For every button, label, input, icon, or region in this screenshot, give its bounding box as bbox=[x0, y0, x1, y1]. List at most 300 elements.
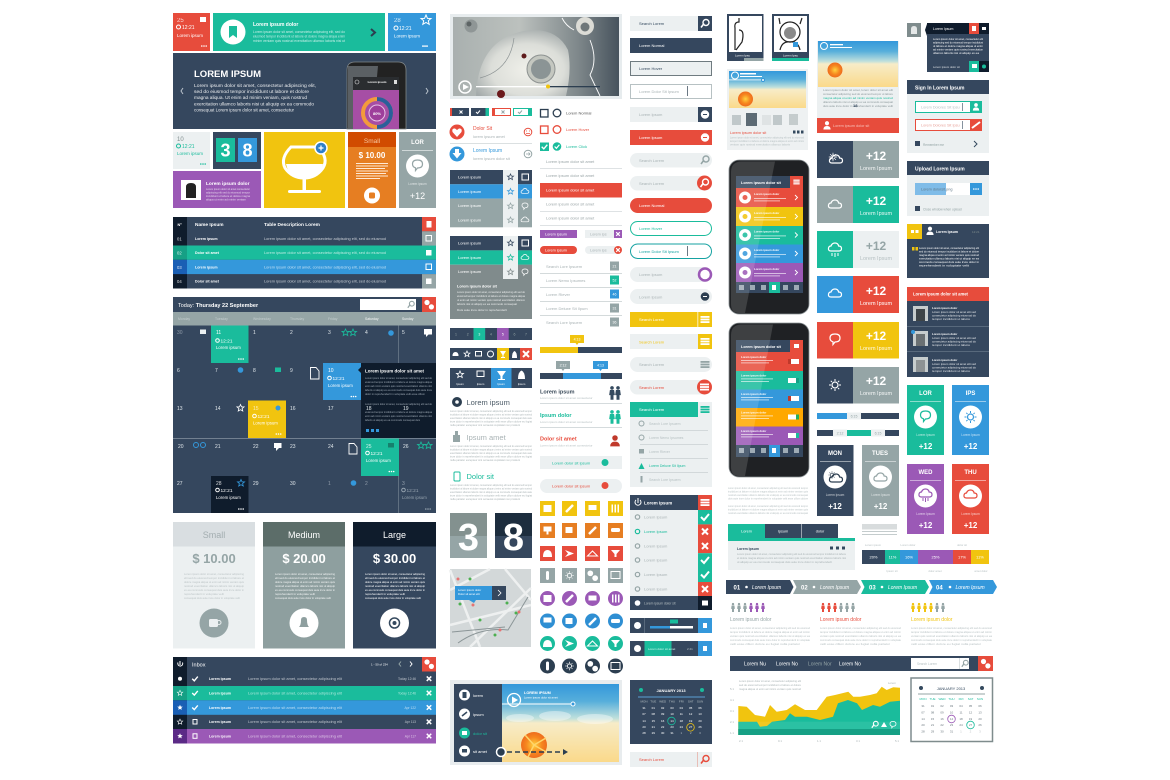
area chart: 5.1 bbox=[895, 739, 899, 743]
input set: pill fields: Lorem Hover bbox=[639, 226, 663, 231]
beach card with red footer: consectetur adipiscing sed do eiusmod tempor ut labore bbox=[823, 92, 893, 96]
white mini calendar: 01 bbox=[931, 704, 934, 708]
hero banner with phone: sed do eiusmod tempor incididunt ut labore et dolore bbox=[194, 89, 309, 95]
tag chips bbox=[540, 230, 622, 254]
segmented percentage bar: dolor amet bbox=[928, 569, 942, 573]
quote card: commodo consequat duis aute irure dolor in bbox=[919, 260, 979, 264]
list with count badges: Search Lore Ipsuem bbox=[546, 264, 583, 269]
text link list: Lorem ipsum dolor sit amet bbox=[546, 216, 595, 220]
white mini calendar: 12 bbox=[969, 710, 972, 714]
data table: 03 bbox=[177, 265, 182, 270]
calendar popover: laboris ut aliquip ex ea commodo consequat duis aute irure bbox=[365, 388, 432, 392]
notification popup: adipiscing sed do eiusmod tempor incididunt bbox=[933, 40, 983, 44]
tile: flip counter 3 8: 3 bbox=[220, 140, 231, 160]
phone one: Lorem ipsum dolor sit bbox=[741, 181, 782, 185]
dark mini calendar: 09 bbox=[661, 712, 665, 716]
area chart: 5.1 bbox=[730, 687, 734, 691]
area chart: 3.1 bbox=[856, 739, 860, 743]
toggle tags bbox=[450, 108, 532, 116]
side menu one: Lorem ipsum bbox=[458, 189, 482, 194]
beach card with red footer: ullamco laboris nisi ut aliquip ex ea commodo consequat bbox=[823, 100, 893, 104]
white mini calendar: 31 bbox=[950, 730, 953, 734]
calendar day numbers: 27 bbox=[177, 481, 183, 487]
tile: flip counter 3 8 bbox=[213, 132, 261, 169]
heading block: dolor sit: nulla pariatur excepteur sint occaecat cupidatat non proident bbox=[450, 497, 520, 501]
forecast card: ips: Lorem Ipsum bbox=[961, 433, 980, 437]
notification popup bbox=[907, 23, 989, 72]
calendar event: 11 green: Lorem ipsum bbox=[216, 345, 241, 350]
navigation bar: Lorem Nu bbox=[744, 662, 766, 668]
calendar day numbers: 13 bbox=[177, 406, 183, 412]
forecast card: lor: LOR bbox=[919, 391, 932, 397]
comic tile two bbox=[772, 14, 809, 61]
calendar day numbers: 2 bbox=[365, 481, 368, 487]
dark mini calendar: 20 bbox=[698, 719, 702, 723]
calendar weekday bar: Sunday bbox=[402, 317, 414, 321]
white mini calendar: 04 bbox=[959, 704, 963, 708]
phone in banner: 80% bbox=[373, 111, 381, 116]
weather tile: red yellow bbox=[817, 322, 899, 358]
music player with beach: LOREM IPSUM bbox=[524, 691, 551, 695]
dark mini calendar: 2 bbox=[690, 731, 692, 735]
notice buttons: Lorem dolor sit ipsum bbox=[552, 483, 591, 488]
tile: purple profile: adipiscing elit sed do eiusmod tempor bbox=[206, 190, 250, 194]
heading block: ipsum amet: irure dolor in reprehenderit in voluptate velit esse cillum dolore eu fugiat bbox=[450, 454, 532, 458]
heading block: lorem ipsum: incididunt ut labore et dolore magna aliqua ut enim ad minim veniam quis nostrud bbox=[450, 412, 532, 416]
step arrows: 03 bbox=[869, 586, 876, 592]
segmented percentage bar: 11% bbox=[976, 554, 984, 560]
data table: 04 bbox=[177, 279, 182, 284]
input set: search and form states bbox=[630, 16, 712, 145]
profile rows with figures: Lorem ipsum dolor sit amet consectetur bbox=[540, 420, 593, 424]
list card with red header: Lorem ipsum dolor sit amet elit sed bbox=[932, 362, 977, 366]
pricing card: small: dolore magna aliqua ut enim ad minim veniam quis bbox=[184, 580, 244, 584]
dark mini calendar: 02 bbox=[661, 706, 665, 710]
media bar one bbox=[630, 618, 712, 633]
calendar event: 3 muted: Lorem ipsum bbox=[402, 495, 427, 500]
calendar event: 25 green: 12:21 bbox=[370, 451, 383, 457]
white mini calendar: 06 bbox=[978, 704, 982, 708]
calendar popover: Lorem ipsum dolor sit amet, consectetur adipiscing elit sed do bbox=[365, 402, 432, 406]
forecast card: thu: Lorem Ipsum bbox=[961, 512, 980, 516]
inbox list: Apr 113 bbox=[405, 720, 416, 724]
white mini calendar: 30 bbox=[940, 730, 944, 734]
forecast card: wed: +12 bbox=[919, 521, 933, 530]
calendar popover: enim ad minim veniam quis nostrud exercitation ullamco nisi bbox=[365, 384, 432, 388]
calendar event: 11 green bbox=[211, 326, 248, 363]
data table: 02 bbox=[177, 250, 182, 256]
input set: search and form states: Lorem Dolor Sit Ipsum bbox=[639, 89, 679, 94]
dark mini calendar: 03 bbox=[670, 706, 674, 710]
people stat two: Lorem ipsum dolor bbox=[820, 617, 862, 623]
people stat three: veniam quis nostrud exercitation ullamco laboris nisi ut aliquip ex ea bbox=[911, 634, 992, 638]
beach card with gallery: Lorem ipsum dolor sit amet, consectetur adipiscing elit sed do eiusmod bbox=[730, 136, 804, 140]
input set: search and form states: Lorem Ipsum bbox=[639, 135, 663, 140]
tag chips: Lorem ips bbox=[590, 248, 607, 252]
quote card: sed do eiusmod tempor incididunt ut labore et dolore bbox=[919, 250, 979, 254]
input set: pill fields bbox=[630, 153, 712, 304]
side menu two with text panel: laboris nisi ut aliquip ex ea commodo consequat bbox=[457, 302, 517, 306]
task list with status: Lorem Ipsum bbox=[644, 572, 668, 577]
list with count badges: Lorem Nemo Ipsumes bbox=[546, 278, 585, 283]
checkbox and radio states: Lorem Hover bbox=[566, 127, 590, 132]
calendar event: 15 yellow: 15 bbox=[253, 406, 259, 412]
tile: blue event: Lorem ipsum bbox=[394, 34, 420, 38]
inbox list: Today 12:46 bbox=[398, 691, 416, 695]
dark mini calendar: 06 bbox=[698, 706, 702, 710]
people stat two: veniam quis nostrud exercitation ullamco laboris nisi ut aliquip ex ea bbox=[820, 634, 901, 638]
calendar weekday bar: Wednesday bbox=[253, 317, 271, 321]
heading block: lorem ipsum bbox=[450, 397, 532, 427]
status row: lorem ipsum: lorem ipsum dolor sit bbox=[473, 156, 511, 161]
calendar weekday bar: Tuesday bbox=[215, 317, 228, 321]
calendar event: 11 green: 11 bbox=[216, 330, 221, 336]
area chart: 2.1 bbox=[739, 739, 743, 743]
white mini calendar: 02 bbox=[940, 704, 944, 708]
pagination: 6 bbox=[514, 332, 516, 336]
side menu one bbox=[450, 170, 532, 227]
task list with status bbox=[630, 495, 712, 610]
tile: yellow wine glass bbox=[264, 132, 345, 208]
weather tile: blue red: Lorem Ipsum bbox=[860, 301, 892, 307]
calendar day numbers: 2 bbox=[290, 330, 293, 336]
task list with status: Lorem ipsum dolor sit bbox=[644, 601, 676, 605]
media bar two: 2:41 bbox=[687, 647, 693, 651]
people stat two: tempor incididunt ut labore et dolore magna aliqua ut enim ad minim bbox=[820, 630, 902, 634]
tabbed panel: Lorem ipsum dolor sit amet, consectetur adipiscing elit sed do eiusmod tempor incididunt ut labore bbox=[737, 552, 846, 556]
heading block: lorem ipsum: Lorem ipsum dolor sit amet, consectetur adipiscing elit sed do eiusmod tempor bbox=[450, 409, 532, 413]
tile: blue event: 12:21 bbox=[399, 26, 412, 32]
segmented percentage bar: Ipsum sit bbox=[886, 569, 898, 573]
phone two bbox=[729, 323, 809, 477]
range bar with time bbox=[817, 430, 899, 436]
text block below phone: duis aute irure dolor in reprehenderit in voluptate velit esse cillum dolore bbox=[728, 496, 808, 500]
heading block: dolor sit: Lorem ipsum dolor sit amet, consectetur adipiscing elit sed do eiusmod tempor bbox=[450, 483, 532, 487]
pricing card: large bbox=[353, 522, 436, 648]
tile: grey weather bbox=[399, 132, 436, 208]
beach card with gallery: Lorem ipsum dolor sit bbox=[730, 131, 767, 135]
dark mini calendar: 18 bbox=[680, 719, 683, 723]
inbox list: Lorem ipsum bbox=[209, 677, 231, 681]
list card with red header: consectetur adipiscing eiusmod do bbox=[932, 314, 977, 318]
step arrows bbox=[726, 580, 997, 594]
calendar day numbers: 4 bbox=[365, 330, 368, 336]
pricing card: small: elit sed do eiusmod tempor incididunt ut labore et bbox=[184, 576, 244, 580]
forecast card: thu bbox=[952, 464, 989, 534]
music player with beach: Lorem ipsum dolor sit amet bbox=[524, 696, 558, 700]
data table: Lorem ipsum bbox=[195, 237, 218, 241]
input set: pill fields: Lorem Dolor Sit Ipsum bbox=[639, 249, 679, 254]
calendar icons bbox=[194, 329, 432, 486]
white mini calendar: 14 bbox=[950, 717, 953, 721]
dark mini calendar: 28 bbox=[642, 731, 646, 735]
dark mini calendar: 05 bbox=[689, 706, 693, 710]
white mini calendar: SUN bbox=[977, 697, 983, 701]
area chart: 1.1 bbox=[730, 731, 734, 735]
text block below phone: nostrud exercitation ullamco laboris nisi ut aliquip ex ea commodo consequat bbox=[728, 493, 808, 497]
dropdown menu green: Lorem Nemo Ipsumes bbox=[649, 436, 684, 440]
calendar day numbers: 8 bbox=[253, 368, 256, 374]
area chart: 3.1 bbox=[730, 709, 734, 713]
calendar day numbers: 17 bbox=[328, 406, 334, 412]
data table: Dolor sit amet bbox=[195, 280, 220, 284]
tile: orange price: Small bbox=[364, 138, 381, 145]
data table: Table Description Lorem bbox=[264, 222, 320, 228]
task list with status: Lorem Ipsum bbox=[644, 558, 668, 562]
pricing card: large: Large bbox=[383, 530, 406, 540]
white mini calendar: 2 bbox=[970, 730, 972, 734]
segmented percentage bar: amet dolor bbox=[974, 569, 988, 573]
weather tile: sun dark: +12 bbox=[866, 374, 887, 388]
people stat one bbox=[730, 603, 811, 646]
tile: blue event bbox=[388, 13, 436, 51]
side menu one: Lorem ipsum bbox=[458, 218, 482, 222]
weather tile: partly cloudy bbox=[817, 141, 899, 178]
white mini calendar: THU bbox=[948, 697, 955, 701]
forecast card: tues: +12 bbox=[874, 502, 888, 511]
inbox list: Lorem ipsum dolor sit amet, consectetur adipiscing elit bbox=[248, 734, 342, 738]
list card with red header: Lorem ipsum dolor bbox=[932, 306, 958, 310]
weather tile: partly cloudy: +12 bbox=[866, 149, 887, 163]
heading block: ipsum amet: Ipsum amet bbox=[466, 433, 507, 442]
weather tile: blue red bbox=[817, 276, 899, 313]
white mini calendar: 31 bbox=[921, 704, 925, 708]
data table: Lorem ipsum bbox=[195, 266, 218, 270]
pricing card: medium: Lorem ipsum dolor sit amet, consectetur adipiscing bbox=[275, 572, 335, 576]
white mini calendar: MON bbox=[920, 697, 926, 701]
map with callout: Dolor sit amet elit bbox=[458, 592, 480, 596]
dark mini calendar: 10 bbox=[670, 712, 674, 716]
calendar day numbers: 29 bbox=[253, 481, 259, 487]
pricing card: small: nostrud exercitation ullamco laboris nisi ut aliquip bbox=[184, 584, 244, 588]
pricing card: small: consequat duis aute irure dolor in voluptate velit bbox=[184, 596, 240, 600]
flat icon grid: squares bbox=[540, 501, 623, 583]
calendar day numbers: 30 bbox=[177, 330, 183, 336]
step arrows: 02 bbox=[801, 586, 808, 592]
list card with red header: Lorem ipsum dolor sit amet elit sed bbox=[932, 310, 977, 314]
navigation bar: Lorem Nor bbox=[808, 662, 832, 668]
weather tile: cloudy green: Lorem Ipsum bbox=[860, 211, 892, 217]
weather tile: cloudy green: +12 bbox=[866, 194, 887, 208]
calendar popover: dolor in reprehenderit in voluptate velit esse cillum bbox=[365, 392, 425, 396]
dark mini calendar: 3 bbox=[699, 731, 701, 735]
dark mini calendar: 04 bbox=[680, 706, 683, 710]
tile: green bookmark news bbox=[213, 13, 385, 51]
white mini calendar: 19 bbox=[969, 717, 972, 721]
list card with red header: consectetur adipiscing eiusmod do bbox=[932, 340, 977, 344]
slider yellow: 4:13 bbox=[574, 338, 580, 342]
quote card bbox=[907, 224, 989, 278]
tabbed panel bbox=[728, 524, 855, 570]
notice buttons: Lorem dolor sit ipsum bbox=[552, 460, 591, 465]
calendar day numbers: 23 bbox=[290, 444, 296, 450]
calendar weekday bar: Saturday bbox=[365, 317, 379, 321]
segmented percentage bar: Lorem dolor bbox=[901, 543, 916, 547]
segmented percentage bar: 11% bbox=[889, 554, 897, 560]
dark mini calendar: 30 bbox=[661, 731, 665, 735]
list card with red header: tempor incididunt ut labore bbox=[932, 317, 971, 321]
people stat one: Lorem ipsum dolor sit amet, consectetur adipiscing elit sed do eiusmod bbox=[730, 626, 810, 630]
inbox list: Apr 122 bbox=[404, 706, 416, 710]
tile: orange price bbox=[348, 132, 396, 208]
calendar day numbers: 7 bbox=[215, 368, 218, 374]
flat icon grid: circles bbox=[540, 591, 623, 674]
step arrows: Lorem Ipsum bbox=[752, 585, 781, 591]
heading block: dolor sit: exercitation ullamco laboris nisi ut aliquip ex ea commodo consequat duis aute bbox=[450, 490, 532, 494]
white mini calendar: 08 bbox=[931, 710, 934, 714]
task list with status: Lorem Ipsum bbox=[644, 500, 672, 506]
data table: 01 bbox=[177, 236, 182, 242]
calendar event: 28 dark: 12:21 bbox=[220, 488, 233, 494]
phone two: Lorem ipsum dolor bbox=[741, 355, 767, 359]
list with count badges: 21 bbox=[613, 264, 616, 268]
forecast card: ips: IPS bbox=[966, 391, 975, 397]
text block below phone: nostrud exercitation ullamco laboris nisi ut aliquip ex ea commodo consequat bbox=[728, 511, 808, 515]
dark mini calendar: TUE bbox=[650, 700, 656, 704]
weather tile: rain light: +12 bbox=[866, 239, 887, 253]
input set: menu fields: Search Lorem bbox=[639, 340, 665, 344]
data table bbox=[173, 217, 436, 288]
notification popup: ullamco laboris nisi ut aliquip ex ea bbox=[933, 51, 979, 55]
tabbed panel: dolor bbox=[816, 530, 825, 534]
people stat three: velit esse cillum dolore eu fugiat nulla pariatur bbox=[911, 642, 981, 646]
profile rows with figures: Lorem ipsum bbox=[540, 390, 575, 396]
segmented percentage bar: 17% bbox=[958, 554, 966, 560]
beach card with gallery: tempor incididunt ut labore et dolore magna aliqua ut enim ad minim bbox=[730, 139, 805, 143]
dark mini calendar: THU bbox=[669, 700, 675, 704]
people stat one: tempor incididunt ut labore et dolore magna aliqua ut enim ad minim bbox=[730, 630, 811, 634]
tile: light event: 10 bbox=[177, 137, 184, 143]
calendar event: 10 blue: 10 bbox=[328, 368, 334, 374]
upload form: Close window when upload bbox=[923, 208, 962, 212]
list card with red header: tempor incididunt ut labore bbox=[932, 369, 971, 373]
heading block: ipsum amet: incididunt ut labore et dolore magna aliqua ut enim ad minim veniam quis nostrud bbox=[450, 448, 532, 452]
white mini calendar: 1 bbox=[960, 730, 962, 734]
data table: Nº bbox=[178, 223, 182, 227]
calendar day numbers: 1 bbox=[328, 481, 331, 487]
dark mini calendar: 08 bbox=[652, 712, 655, 716]
pricing card: small: Lorem ipsum dolor sit amet, consectetur adipiscing bbox=[184, 572, 244, 576]
range bar with time: 2:12 bbox=[837, 432, 843, 436]
slider blue range: 4:13 bbox=[597, 364, 604, 368]
pagination: 3 bbox=[478, 332, 480, 336]
pricing card: medium: nostrud exercitation ullamco laboris nisi ut aliquip bbox=[275, 584, 335, 588]
white mini calendar: FRI bbox=[959, 697, 964, 701]
pricing card: medium: $ 20.00 bbox=[282, 551, 326, 566]
tile: green bookmark news: Lorem ipsum dolor bbox=[253, 22, 298, 28]
status row: lorem ipsum bbox=[450, 143, 532, 162]
calendar weekday bar bbox=[173, 312, 436, 326]
weather tile: cloudy green bbox=[817, 186, 899, 223]
white mini calendar: WED bbox=[938, 697, 946, 701]
segmented percentage bar: 16% bbox=[905, 554, 913, 560]
input set: pill fields: Search Lorem bbox=[639, 181, 665, 186]
forecast card: ips: +12 bbox=[964, 442, 978, 451]
side menu two with text panel: Lorem ipsum dolor sit amet, consectetur adipiscing elit sed do bbox=[457, 290, 525, 294]
white mini calendar: 15 bbox=[931, 717, 934, 721]
input set: menu fields: Search Lorem bbox=[639, 317, 665, 322]
hero banner with phone: magna aliqua. Ut enim ad minim veniam, quis nostrud bbox=[194, 95, 307, 101]
white mini calendar: 03 bbox=[950, 704, 953, 708]
weather tile: sun dark: Lorem Ipsum bbox=[860, 391, 892, 397]
quote card: magna aliqua ut enim ad minim veniam quis nostrud bbox=[919, 253, 979, 257]
calendar event: 10 blue: Lorem ipsum bbox=[328, 383, 353, 388]
pricing card: large: elit sed do eiusmod tempor incididunt ut labore et bbox=[365, 576, 425, 580]
redacted heading lines bbox=[862, 524, 897, 535]
icon toolbar bbox=[450, 348, 532, 360]
dark mini calendar: 12 bbox=[689, 712, 693, 716]
bottom search field bbox=[630, 752, 712, 767]
hero banner with phone: consequat Lorem ipsum dolor sit amet, consectetur bbox=[194, 108, 294, 114]
task list with status: Lorem Ipsum bbox=[644, 586, 668, 592]
pricing card: large: dolore magna aliqua ut enim ad minim veniam quis bbox=[365, 580, 425, 584]
segmented percentage bar: 25% bbox=[931, 554, 940, 560]
calendar day numbers: 24 bbox=[328, 444, 334, 450]
checkbox and radio states: Lorem Normal bbox=[566, 110, 591, 116]
input set: menu fields: Search Lorem bbox=[639, 362, 665, 367]
calendar day numbers: 6 bbox=[177, 368, 180, 374]
people stat three: tempor incididunt ut labore et dolore magna aliqua ut enim ad minim bbox=[911, 630, 993, 634]
calendar popover bbox=[358, 363, 436, 438]
hero banner with phone bbox=[173, 53, 436, 129]
pagination: 4 bbox=[490, 332, 492, 336]
status row: dolor sit: Dolor Sit bbox=[473, 126, 493, 132]
step arrows: 04 bbox=[936, 586, 943, 592]
dark mini calendar: FRI bbox=[679, 700, 684, 704]
dark mini calendar: 31 bbox=[642, 706, 646, 710]
white mini calendar: 23 bbox=[950, 723, 953, 727]
hero banner with phone: LOREM IPSUM bbox=[194, 69, 261, 80]
tile: grey weather: Lorem ipsum bbox=[408, 182, 427, 186]
tab bar: Ipsum bbox=[477, 382, 485, 386]
side menu two with text panel: Lorem ipsum bbox=[458, 255, 482, 260]
phone one: Lorem ipsum dolor bbox=[754, 230, 780, 234]
dropdown menu green bbox=[630, 402, 712, 487]
beach card with red footer: Lorem ipsum dolor sit amet, lorem dolor sit amet elit bbox=[823, 88, 893, 92]
white mini calendar: 3 bbox=[979, 730, 981, 734]
dark mini calendar: 1 bbox=[680, 731, 682, 735]
status row: lorem ipsum: Lorem Ipsum bbox=[473, 148, 502, 154]
inbox list: Inbox bbox=[192, 662, 206, 668]
upload form: Upload Lorem Ipsum bbox=[915, 166, 965, 172]
pagination: 2 bbox=[467, 332, 469, 336]
white mini calendar: 11 bbox=[959, 710, 963, 714]
calendar event: 28 dark: Lorem ipsum bbox=[216, 495, 241, 500]
inbox list: Lorem ipsum dolor sit amet, consectetur adipiscing elit bbox=[248, 720, 342, 724]
input set: search and form states: Lorem Hover bbox=[639, 66, 663, 71]
tile: red event bbox=[173, 13, 210, 51]
input set: pill fields: Lorem Ipsum bbox=[639, 272, 663, 277]
tile: red event: 25 bbox=[177, 18, 184, 24]
pricing card: small: $ 10.00 bbox=[192, 551, 236, 566]
notification popup: ut labore et dolore magna aliqua ut enim bbox=[933, 44, 984, 48]
tile: red event: 12:21 bbox=[182, 25, 195, 31]
profile rows with figures: Ipsum dolor bbox=[540, 413, 572, 419]
tabbed panel: Ipsum bbox=[778, 530, 788, 534]
tabbed panel: ut aliquip ex ea commodo consequat duis aute irure dolor in reprehenderit bbox=[737, 560, 832, 564]
tile: light event: Lorem ipsum bbox=[177, 151, 203, 156]
bottom search field: Search Lorem bbox=[639, 757, 665, 762]
beach card with red footer bbox=[817, 41, 899, 133]
calendar day numbers: 20 bbox=[178, 444, 184, 450]
dark mini calendar: 22 bbox=[661, 725, 665, 729]
step arrows: Lorem Ipsum bbox=[888, 585, 917, 591]
pricing card: medium: Medium bbox=[288, 530, 320, 540]
tile: grey weather: +12 bbox=[410, 191, 425, 201]
inbox list: Lorem ipsum bbox=[209, 720, 231, 724]
music player with beach: dolor sit bbox=[473, 731, 488, 736]
tab bar: Ipsum bbox=[497, 382, 505, 386]
